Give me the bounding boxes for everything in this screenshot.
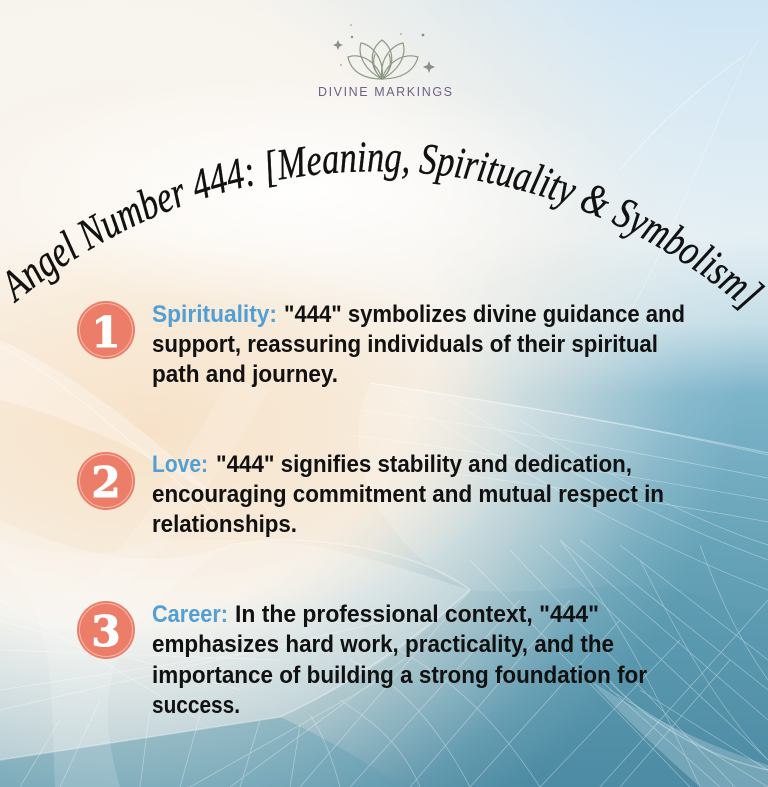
item 1: spirituality bbox=[77, 301, 685, 388]
title: curved heading: Angel Number 444: [Meaning, Spirituality & Symbolism] bbox=[6, 142, 766, 311]
logo wordmark: DIVINE MARKINGS bbox=[318, 85, 452, 99]
text 1: path and journey. bbox=[152, 361, 338, 388]
text 1: support, reassuring individuals of their spiritual bbox=[152, 331, 658, 358]
text 2: encouraging commitment and mutual respect in bbox=[152, 481, 664, 508]
badge 3 bbox=[77, 601, 135, 659]
text 2: Love: bbox=[152, 451, 208, 478]
text 2: "444" signifies stability and dedication, bbox=[216, 451, 632, 478]
badge 1: 1 bbox=[91, 308, 121, 357]
item 2: love bbox=[77, 451, 664, 538]
text 3: In the professional context, "444" bbox=[235, 601, 599, 628]
icon: lotus bbox=[348, 40, 418, 79]
logo: Divine Markings bbox=[318, 24, 452, 99]
text 3: Career: bbox=[152, 601, 228, 628]
item 3: career bbox=[77, 601, 647, 719]
icon: sparkles bbox=[333, 24, 435, 73]
text 3: importance of building a strong foundation for bbox=[152, 662, 647, 689]
text 3: emphasizes hard work, practicality, and the bbox=[152, 631, 614, 658]
text 3: success. bbox=[152, 692, 240, 719]
text 2: relationships. bbox=[152, 511, 297, 538]
badge 2: 2 bbox=[91, 458, 121, 507]
text 1: "444" symbolizes divine guidance and bbox=[284, 301, 685, 328]
badge 1 bbox=[77, 301, 135, 359]
text 1: Spirituality: bbox=[152, 301, 277, 328]
badge 2 bbox=[77, 452, 135, 510]
badge 3: 3 bbox=[91, 607, 121, 656]
